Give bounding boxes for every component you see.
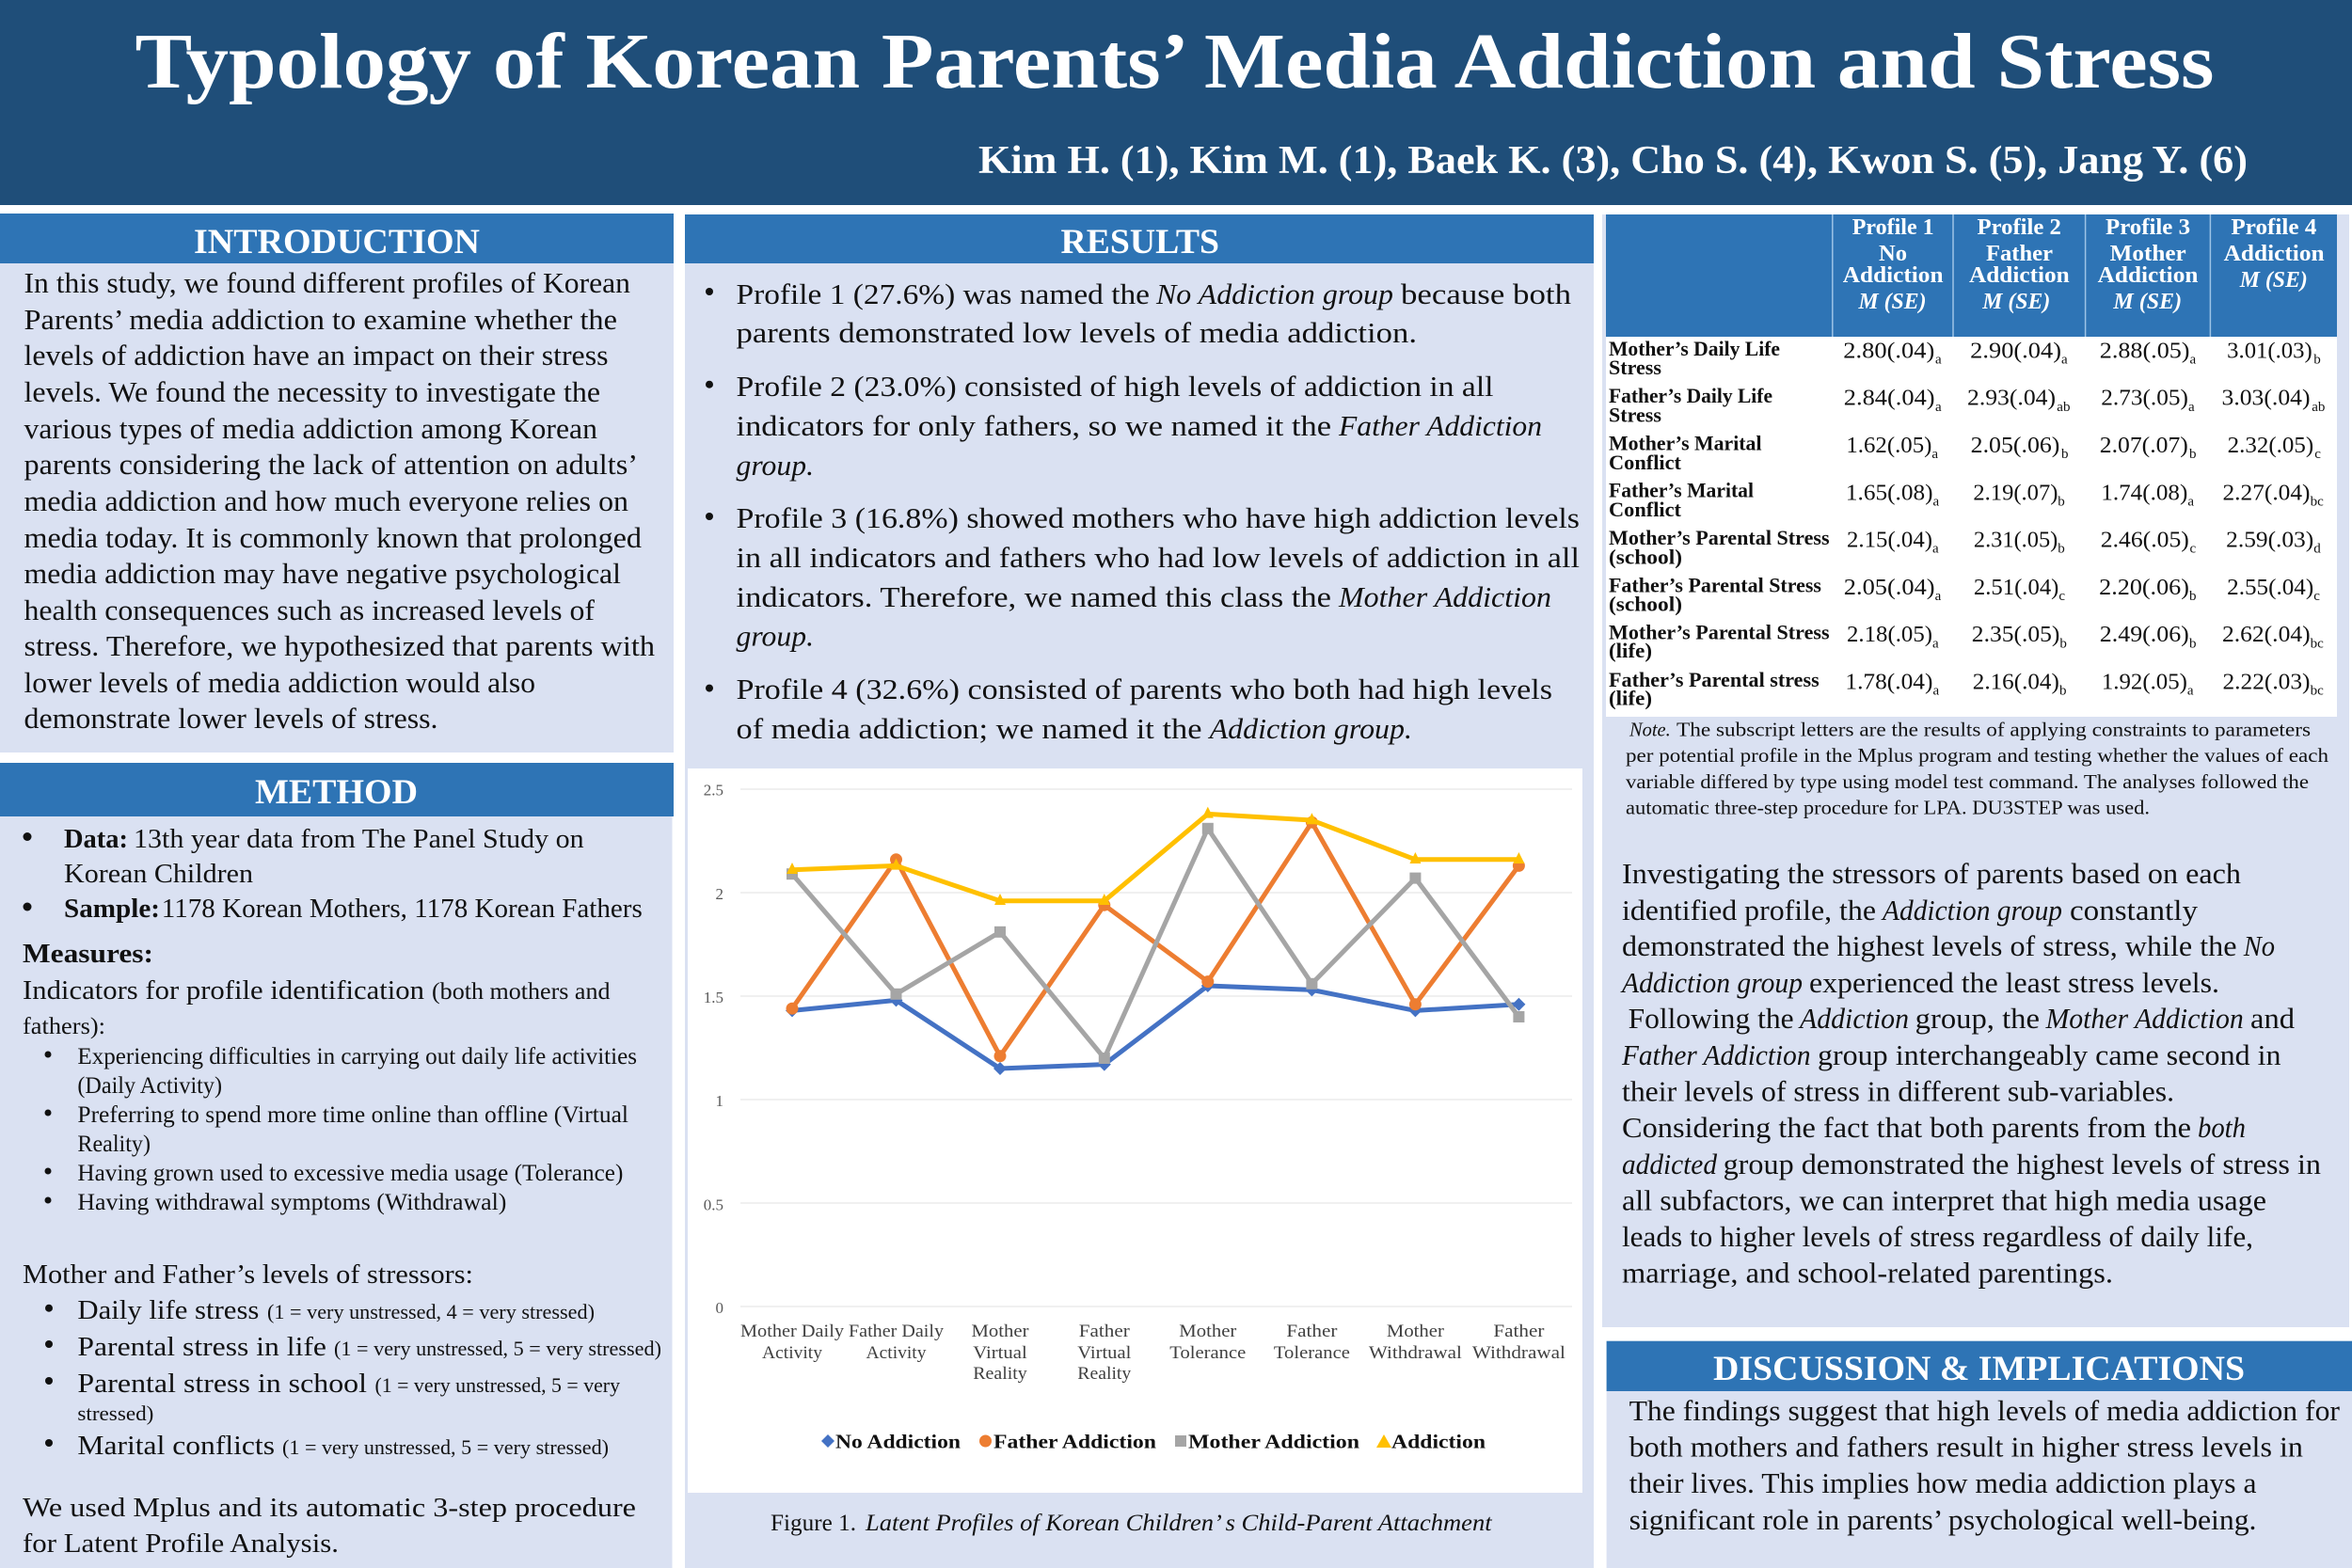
table values: 1.92(.05) (2102, 670, 2187, 694)
interpretation paragraph: identified profile, the (1622, 894, 1876, 927)
results bullets: indicators. Therefore, we named this class the (736, 580, 1331, 613)
panel: introduction (0, 214, 674, 752)
table row labels: Stress (1609, 403, 1661, 427)
results bullets: Mother Addiction (1338, 580, 1551, 613)
table row labels: Father’s Marital (1609, 479, 1754, 502)
y axis labels: 1 (715, 1092, 723, 1110)
indicators list: Having withdrawal symptoms (Withdrawal) (77, 1190, 506, 1215)
x axis labels: Virtual (1077, 1343, 1131, 1363)
table values: 2.15(.04) (1847, 529, 1932, 553)
stressors list: Parental stress in life (77, 1332, 326, 1362)
table values: bc (2311, 684, 2324, 699)
interpretation paragraph: addicted (1622, 1148, 1717, 1180)
table values: a (2061, 352, 2068, 367)
table row labels: (life) (1609, 687, 1652, 709)
table header: Profile 4 (2231, 215, 2316, 240)
table values: b (2058, 494, 2065, 509)
stressors list: Mother and Father’s levels of stressors: (23, 1259, 473, 1290)
y axis labels: 2 (715, 885, 723, 903)
table values: 2.05(.06) (1971, 434, 2059, 458)
analysis note: for Latent Profile Analysis. (23, 1528, 339, 1559)
table row labels (1609, 337, 1830, 709)
stressors list: Marital conflicts (77, 1431, 275, 1461)
panel: results (685, 214, 1594, 1568)
x axis labels: Father Daily (849, 1322, 945, 1341)
x axis labels (740, 1322, 1565, 1384)
introduction heading: INTRODUCTION (194, 223, 480, 261)
results bullets: because both (1401, 277, 1572, 310)
x axis labels: Mother (971, 1322, 1029, 1341)
table values: 3.03(.04) (2222, 387, 2311, 411)
x axis labels: Reality (1077, 1364, 1132, 1384)
results heading: RESULTS (1061, 223, 1219, 261)
table values: b (2058, 542, 2065, 557)
table values: c (2314, 447, 2321, 462)
discussion text: their lives. This implies how media addiction plays a (1629, 1466, 2257, 1499)
x axis labels: Virtual (973, 1343, 1027, 1363)
table values: 2.84(.04) (1844, 387, 1935, 411)
interpretation paragraph: their levels of stress in different sub-variables. (1622, 1075, 2174, 1108)
table note (1626, 718, 2329, 819)
discussion heading: DISCUSSION & IMPLICATIONS (1713, 1350, 2245, 1388)
data and sample bullets: 1178 Korean Mothers, 1178 Korean Fathers (162, 894, 643, 924)
table values (1843, 339, 2325, 699)
table header: M (SE) (1981, 290, 2050, 314)
interpretation paragraph: Addiction group (1881, 894, 2062, 927)
results bullets: Profile 3 (16.8%) showed mothers who have high addiction levels (736, 501, 1580, 534)
table values: 2.18(.05) (1847, 623, 1932, 647)
analysis note: We used Mplus and its automatic 3-step procedure (23, 1493, 636, 1523)
table values: 2.55(.04) (2227, 576, 2313, 600)
x axis labels: Withdrawal (1369, 1343, 1462, 1363)
table values: 1.78(.04) (1845, 670, 1932, 694)
table values: 2.90(.04) (1970, 339, 2061, 363)
data and sample bullets: Sample: (64, 894, 160, 924)
stressors list: (1 = very unstressed, 5 = very (374, 1373, 620, 1397)
x axis labels: Father (1079, 1322, 1131, 1341)
table values: ab (2057, 400, 2070, 415)
introduction text: media today. It is commonly known that prolonged (24, 521, 643, 554)
table values: b (2059, 636, 2067, 651)
indicators list: Indicators for profile identification (23, 975, 425, 1006)
table header: Profile 1 (1852, 215, 1934, 240)
table values: b (2313, 352, 2321, 367)
table header: No (1879, 242, 1907, 266)
y axis labels (704, 781, 723, 1317)
x axis labels: Tolerance (1169, 1343, 1246, 1363)
table row labels: Conflict (1609, 498, 1682, 521)
table values: a (1935, 400, 1942, 415)
introduction text: lower levels of media addiction would also (24, 666, 535, 699)
data and sample bullets: Data: (64, 824, 128, 854)
data and sample bullets (23, 824, 643, 924)
results bullets: Profile 4 (32.6%) consisted of parents who both had high levels (736, 673, 1552, 705)
table values: bc (2311, 494, 2324, 509)
profile statistics table (1606, 214, 2337, 717)
table header: M (SE) (1858, 290, 1927, 314)
table header: Profile 2 (1978, 215, 2061, 240)
series: mother addiction (787, 823, 1524, 1064)
stressors list: stressed) (77, 1402, 153, 1425)
results bullets: of media addiction; we named it the (736, 712, 1202, 745)
table values: a (1935, 589, 1942, 604)
panel: discussion and implications (1607, 1341, 2352, 1568)
table row labels: (school) (1609, 593, 1682, 616)
table values: 3.01(.03) (2227, 339, 2312, 363)
x axis labels: Reality (973, 1364, 1027, 1384)
table row labels: (life) (1609, 639, 1652, 662)
interpretation paragraph: demonstrated the highest levels of stress, while the (1622, 929, 2237, 962)
table values: a (1932, 684, 1940, 699)
interpretation paragraph: Father Addiction (1621, 1038, 1810, 1071)
interpretation paragraph: leads to higher levels of stress regardless of daily life, (1622, 1220, 2253, 1253)
series: addiction (787, 807, 1524, 905)
stressors list: (1 = very unstressed, 4 = very stressed) (267, 1300, 595, 1323)
table note: The subscript letters are the results of applying constraints to parameters (1677, 718, 2311, 740)
title: Typology of Korean Parents’ Media Addiction and Stress (135, 18, 2215, 105)
introduction text: media addiction and how much everyone relies on (24, 484, 629, 517)
table values: 2.49(.06) (2100, 623, 2189, 647)
introduction text: various types of media addiction among Korean (24, 412, 597, 445)
table header: Addiction (1843, 263, 1944, 288)
indicators list (23, 975, 637, 1215)
table values: c (2313, 589, 2320, 604)
interpretation paragraph: all subfactors, we can interpret that high media usage (1622, 1184, 2266, 1217)
interpretation paragraph: Investigating the stressors of parents based on each (1622, 857, 2242, 890)
table values: b (2061, 447, 2068, 462)
series: father addiction (787, 816, 1525, 1062)
introduction text: levels. We found the necessity to investigate the (24, 375, 600, 408)
table row labels: Mother’s Parental Stress (1609, 621, 1830, 644)
stressors list: Parental stress in school (77, 1369, 367, 1399)
table values: 2.31(.05) (1974, 529, 2058, 553)
method heading: METHOD (255, 773, 418, 812)
interpretation paragraph: and (2250, 1002, 2296, 1035)
x axis labels: Mother (1387, 1322, 1445, 1341)
interpretation paragraph: group interchangeably came second in (1818, 1038, 2281, 1071)
x axis labels: Tolerance (1274, 1343, 1350, 1363)
y axis labels: 2.5 (704, 781, 723, 800)
y axis labels: 0.5 (704, 1196, 723, 1213)
interpretation paragraph: No (2243, 929, 2275, 962)
series: no addiction (786, 979, 1525, 1075)
table header: Profile 3 (2106, 215, 2190, 240)
discussion text: both mothers and fathers result in higher stress levels in (1629, 1431, 2304, 1464)
results bullets: in all indicators and fathers who had low levels of addiction in all (736, 541, 1580, 574)
stressors list (23, 1259, 661, 1461)
table values: 2.22(.03) (2222, 670, 2311, 694)
table header: M (SE) (2112, 290, 2182, 314)
table values: a (1935, 352, 1942, 367)
chart legend: Mother Addiction (1188, 1430, 1359, 1452)
introduction text: levels of addiction have an impact on their stress (24, 339, 608, 372)
table row labels: Father’s Parental stress (1609, 668, 1820, 691)
introduction text: In this study, we found different profiles of Korean (24, 266, 631, 299)
interpretation paragraph: group demonstrated the highest levels of stress in (1724, 1148, 2322, 1180)
indicators list: Reality) (77, 1132, 151, 1157)
interpretation paragraph (1620, 857, 2322, 1289)
table row labels: Mother’s Parental Stress (1609, 526, 1830, 549)
x axis labels: Activity (866, 1343, 927, 1363)
table values: 2.62(.04) (2222, 623, 2311, 647)
table note: automatic three-step procedure for LPA. DU3STEP was used. (1626, 797, 2150, 819)
stressors list: Daily life stress (77, 1295, 259, 1325)
measures heading: Measures: (23, 939, 153, 969)
table values: a (1932, 494, 1940, 509)
table values: 2.32(.05) (2228, 434, 2313, 458)
indicators list: (both mothers and (432, 979, 611, 1005)
table values: a (1932, 636, 1939, 651)
table values: 2.20(.06) (2099, 576, 2189, 600)
table values: b (2059, 684, 2066, 699)
interpretation paragraph: both (2198, 1111, 2246, 1144)
interpretation paragraph: marriage, and school-related parentings. (1622, 1256, 2113, 1289)
introduction text: demonstrate lower levels of stress. (24, 702, 438, 735)
table values: 2.35(.05) (1972, 623, 2059, 647)
introduction text: health consequences such as increased levels of (24, 594, 596, 626)
table values: b (2189, 589, 2196, 604)
results bullets: group. (736, 449, 814, 482)
table note: per potential profile in the Mplus program and testing whether the values of each (1626, 744, 2329, 767)
table values: c (2190, 542, 2196, 557)
y axis labels: 1.5 (704, 989, 723, 1006)
table note: variable differed by type using model test command. The analyses followed the (1626, 770, 2309, 793)
table header: Addiction (2098, 263, 2198, 288)
table header: Father (1986, 242, 2053, 266)
table header: Addiction (2224, 242, 2325, 266)
panel: method (0, 763, 674, 1568)
panel: table and interpretation (1602, 214, 2349, 1327)
table header: Mother (2110, 242, 2186, 266)
table values: 2.27(.04) (2222, 481, 2311, 505)
results bullets: Profile 2 (23.0%) consisted of high levels of addiction in all (736, 370, 1494, 403)
introduction text (24, 266, 656, 735)
table row labels: Father’s Parental Stress (1609, 573, 1821, 596)
x axis labels: Father (1286, 1322, 1338, 1341)
table values: 2.46(.05) (2101, 529, 2189, 553)
results bullets: Addiction group. (1208, 712, 1412, 745)
interpretation paragraph: Addiction (1798, 1002, 1909, 1035)
stressors list: (1 = very unstressed, 5 = very stressed) (282, 1435, 609, 1459)
header banner (0, 0, 2352, 205)
line chart (688, 768, 1582, 1493)
table values: 1.74(.08) (2101, 481, 2187, 505)
introduction heading (0, 214, 674, 263)
results bullets (706, 277, 1580, 745)
table values: 1.62(.05) (1846, 434, 1931, 458)
table header (1606, 214, 2337, 337)
table values: bc (2311, 636, 2324, 651)
results bullets: indicators for only fathers, so we named it the (736, 409, 1331, 442)
x axis labels: Mother (1179, 1322, 1237, 1341)
table values: 2.80(.04) (1843, 339, 1934, 363)
table values: 2.07(.07) (2100, 434, 2188, 458)
table values: 2.88(.05) (2100, 339, 2190, 363)
results bullets: No Addiction group (1155, 277, 1393, 310)
introduction text: media addiction may have negative psychological (24, 557, 621, 590)
interpretation paragraph: Mother Addiction (2045, 1002, 2244, 1035)
table header: Addiction (1969, 263, 2070, 288)
x axis labels: Withdrawal (1472, 1343, 1565, 1363)
table values: 1.65(.08) (1846, 481, 1932, 505)
results bullets: parents demonstrated low levels of media addiction. (736, 316, 1417, 349)
chart legend (821, 1430, 1486, 1452)
table row labels: Stress (1609, 356, 1661, 379)
figure caption: Figure 1. (771, 1511, 856, 1536)
stressors list: (1 = very unstressed, 5 = very stressed) (334, 1337, 661, 1360)
introduction text: Parents’ media addiction to examine whether the (24, 303, 617, 336)
indicators list: (Daily Activity) (77, 1073, 222, 1099)
table values: c (2058, 589, 2065, 604)
interpretation paragraph: Following the (1629, 1002, 1794, 1035)
table values: a (2190, 352, 2196, 367)
table row labels: Father’s Daily Life (1609, 384, 1772, 407)
indicators list: fathers): (23, 1014, 105, 1039)
indicators list: Preferring to spend more time online than offline (Virtual (77, 1102, 628, 1128)
table values: ab (2312, 400, 2325, 415)
results bullets: Father Addiction (1338, 409, 1542, 442)
x axis labels: Activity (762, 1343, 823, 1363)
table row labels: (school) (1609, 545, 1682, 568)
interpretation paragraph: experienced the least stress levels. (1809, 966, 2219, 999)
table row labels: Mother’s Daily Life (1609, 337, 1780, 360)
table values: a (2187, 494, 2194, 509)
indicators list: Having grown used to excessive media usage (Tolerance) (77, 1161, 623, 1186)
indicators list: Experiencing difficulties in carrying out daily life activities (77, 1044, 637, 1069)
chart legend: Addiction (1391, 1430, 1486, 1452)
table values: 2.73(.05) (2101, 387, 2188, 411)
discussion text: significant role in parents’ psychological well-being. (1629, 1503, 2256, 1536)
interpretation paragraph: constantly (2070, 894, 2199, 927)
figure caption: Latent Profiles of Korean Children’ s Child-Parent Attachment (865, 1511, 1493, 1536)
introduction text: stress. Therefore, we hypothesized that parents with (24, 629, 656, 662)
analysis note (23, 1493, 636, 1559)
data and sample bullets: Korean Children (64, 859, 254, 889)
results bullets: Profile 1 (27.6%) was named the (736, 277, 1150, 310)
discussion text: The findings suggest that high levels of media addiction for (1629, 1394, 2341, 1427)
table values: a (1931, 447, 1938, 462)
x axis labels: Father (1493, 1322, 1545, 1341)
table values: a (2187, 684, 2194, 699)
authors: Kim H. (1), Kim M. (1), Baek K. (3), Cho S. (4), Kwon S. (5), Jang Y. (6) (978, 139, 2248, 182)
introduction text: parents considering the lack of attention on adults’ (24, 448, 638, 481)
table values: 2.59(.03) (2226, 529, 2313, 553)
interpretation paragraph: Considering the fact that both parents from the (1622, 1111, 2191, 1144)
interpretation paragraph: group, the (1915, 1002, 2040, 1035)
table note: Note. (1629, 718, 1671, 740)
interpretation paragraph: Addiction group (1620, 966, 1803, 999)
table values: 2.19(.07) (1973, 481, 2058, 505)
table values: 2.16(.04) (1973, 670, 2059, 694)
data and sample bullets: 13th year data from The Panel Study on (134, 824, 584, 854)
table values: b (2189, 447, 2196, 462)
results heading (685, 214, 1594, 263)
table values: 2.93(.04) (1967, 387, 2056, 411)
table values: 2.05(.04) (1844, 576, 1935, 600)
results bullets: group. (736, 619, 814, 653)
x axis labels: Mother Daily (740, 1322, 845, 1341)
table values: 2.51(.04) (1974, 576, 2058, 600)
method heading (0, 763, 674, 816)
table header: M (SE) (2239, 268, 2308, 293)
y axis labels: 0 (715, 1299, 723, 1317)
table values: d (2313, 542, 2321, 557)
discussion heading (1607, 1341, 2352, 1391)
table values: a (1932, 542, 1939, 557)
chart legend: Father Addiction (993, 1430, 1156, 1452)
chart legend: No Addiction (835, 1430, 961, 1452)
table values: b (2189, 636, 2196, 651)
table row labels: Conflict (1609, 451, 1682, 474)
table row labels: Mother’s Marital (1609, 431, 1761, 454)
discussion text (1629, 1394, 2341, 1536)
table values: a (2188, 400, 2195, 415)
